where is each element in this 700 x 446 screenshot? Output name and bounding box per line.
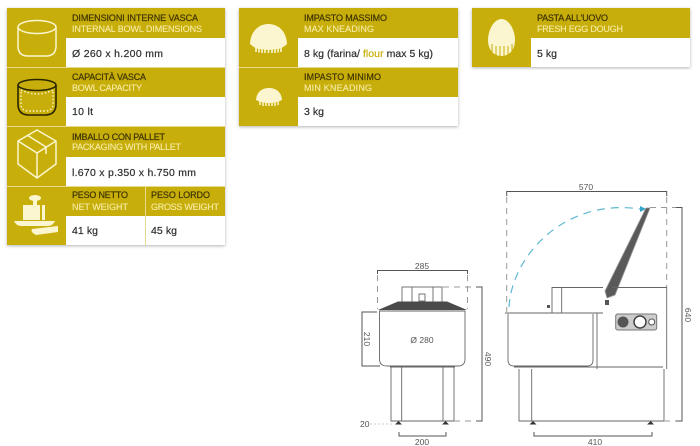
dimension: bowl height 210: 210: [362, 332, 372, 346]
control panel: [616, 314, 657, 330]
icon: bowl dimensions: [18, 20, 56, 56]
text: gross weight: PESO LORDO: [151, 190, 210, 200]
icon: small dough dome: [256, 88, 282, 106]
text: internal bowl dimensions: INTERNAL BOWL DIMENSIONS: [72, 24, 202, 34]
text: internal bowl dimensions: [72, 13, 202, 60]
text: packaging with pallet: [72, 132, 196, 179]
dimension: height 640: 640: [683, 308, 693, 322]
panel: bowl and packaging specifications: [7, 8, 225, 245]
dimension: feet 410: [534, 432, 652, 446]
text: max kneading: IMPASTO MASSIMO: [304, 13, 387, 23]
text: net weight: [72, 190, 128, 237]
text: min kneading: IMPASTO MINIMO: [304, 72, 381, 82]
text: bowl capacity: CAPACITÀ VASCA: [72, 72, 146, 82]
dimension: feet 200: [399, 432, 446, 446]
icon: egg: [488, 19, 515, 56]
dimension: foot 20: [360, 419, 392, 429]
text: packaging with pallet: l.670 x p.350 x h.750 mm: [72, 167, 196, 179]
text: min kneading: 3 kg: [304, 106, 324, 118]
dimension: width 570: 570: [579, 182, 593, 192]
text: max kneading: 8 kg (farina/ flour max 5 kg): [304, 48, 433, 60]
dimension: height 640: [650, 208, 693, 421]
icon: bowl capacity: [18, 80, 56, 115]
text: net weight: 41 kg: [72, 225, 98, 237]
text: packaging with pallet: IMBALLO CON PALLET: [72, 132, 166, 142]
text: gross weight: GROSS WEIGHT: [151, 202, 220, 212]
machine front body: Ø 280: [410, 335, 434, 345]
text: fresh egg dough: PASTA ALL'UOVO: [537, 13, 608, 23]
text: packaging with pallet: PACKAGING WITH PALLET: [72, 142, 182, 152]
text: net weight: NET WEIGHT: [72, 202, 128, 212]
icon: packaging box: [18, 130, 56, 178]
text: fresh egg dough: 5 kg: [537, 48, 557, 60]
text: min kneading: MIN KNEADING: [304, 83, 372, 93]
dimension: width 285: [378, 261, 468, 309]
dimension: width 570: [507, 182, 667, 312]
text: fresh egg dough: [537, 13, 623, 60]
dimension: height 490: 490: [483, 352, 493, 366]
text: bowl capacity: [72, 72, 146, 118]
text: net weight: PESO NETTO: [72, 190, 128, 200]
text: bowl capacity: BOWL CAPACITY: [72, 83, 142, 93]
arrow: lid opening arc: [509, 206, 646, 307]
text: bowl capacity: 10 lt: [72, 106, 93, 118]
text: min kneading: [304, 72, 381, 118]
text: fresh egg dough: FRESH EGG DOUGH: [537, 24, 623, 34]
dimension: height 490: [443, 287, 493, 421]
chart: machine front view technical drawing: [360, 261, 493, 446]
text: internal bowl dimensions: Ø 260 x h.200 mm: [72, 48, 163, 60]
text: max kneading: MAX KNEADING: [304, 24, 374, 34]
panel: kneading capacity: [239, 8, 458, 126]
text: internal bowl dimensions: DIMENSIONI INTERNE VASCA: [72, 13, 198, 23]
icon: large dough dome: [250, 24, 287, 53]
dimension: width 285: 285: [415, 261, 429, 271]
dimension: bowl height 210: [362, 312, 380, 366]
text: gross weight: [151, 190, 220, 237]
dimension: foot 20: 20: [360, 419, 370, 429]
text: gross weight: 45 kg: [151, 225, 177, 237]
panel: fresh egg dough: [472, 8, 690, 67]
machine side body: [505, 288, 667, 424]
machine lid raised: [605, 208, 650, 305]
icon: weighing scale: [14, 195, 58, 235]
chart: machine side view technical drawing: [505, 182, 693, 446]
text: max kneading: [304, 13, 433, 60]
machine front body: [378, 287, 467, 424]
